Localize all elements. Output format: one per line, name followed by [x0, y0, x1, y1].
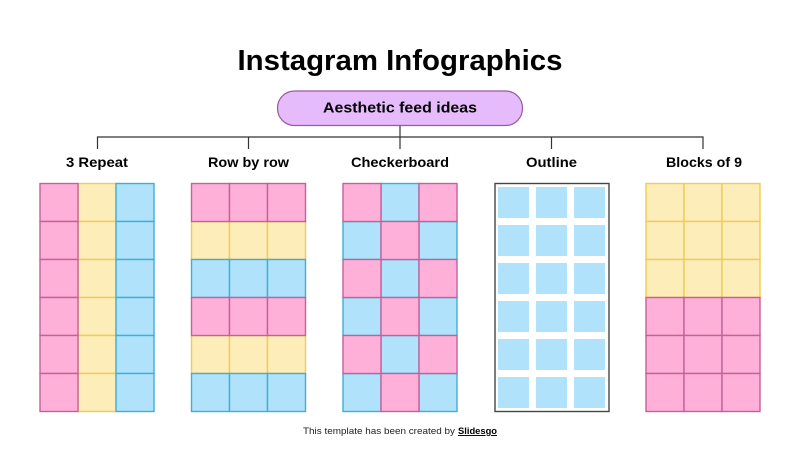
heading: 3 Repeat: 3 Repeat — [66, 154, 128, 170]
footer credit: This template has been created by — [303, 426, 455, 437]
heading: Blocks of 9: Blocks of 9 — [666, 154, 742, 170]
panel: Blocks of 9 grid — [646, 184, 760, 412]
connector lines — [98, 125, 703, 149]
panel: Outline grid — [495, 184, 609, 412]
panel: Row by row grid — [192, 184, 306, 412]
heading: Row by row: Row by row — [208, 154, 289, 170]
heading: Checkerboard: Checkerboard — [351, 154, 449, 170]
footer credit: Slidesgo — [458, 426, 497, 437]
panel: Checkerboard grid — [343, 184, 457, 412]
central pill: Aesthetic feed ideas: Aesthetic feed ideas — [323, 100, 477, 116]
panel: 3 Repeat grid — [40, 184, 154, 412]
title: Instagram Infographics — [238, 45, 562, 77]
heading: Outline: Outline — [526, 154, 577, 170]
central pill: Aesthetic feed ideas — [278, 91, 522, 126]
